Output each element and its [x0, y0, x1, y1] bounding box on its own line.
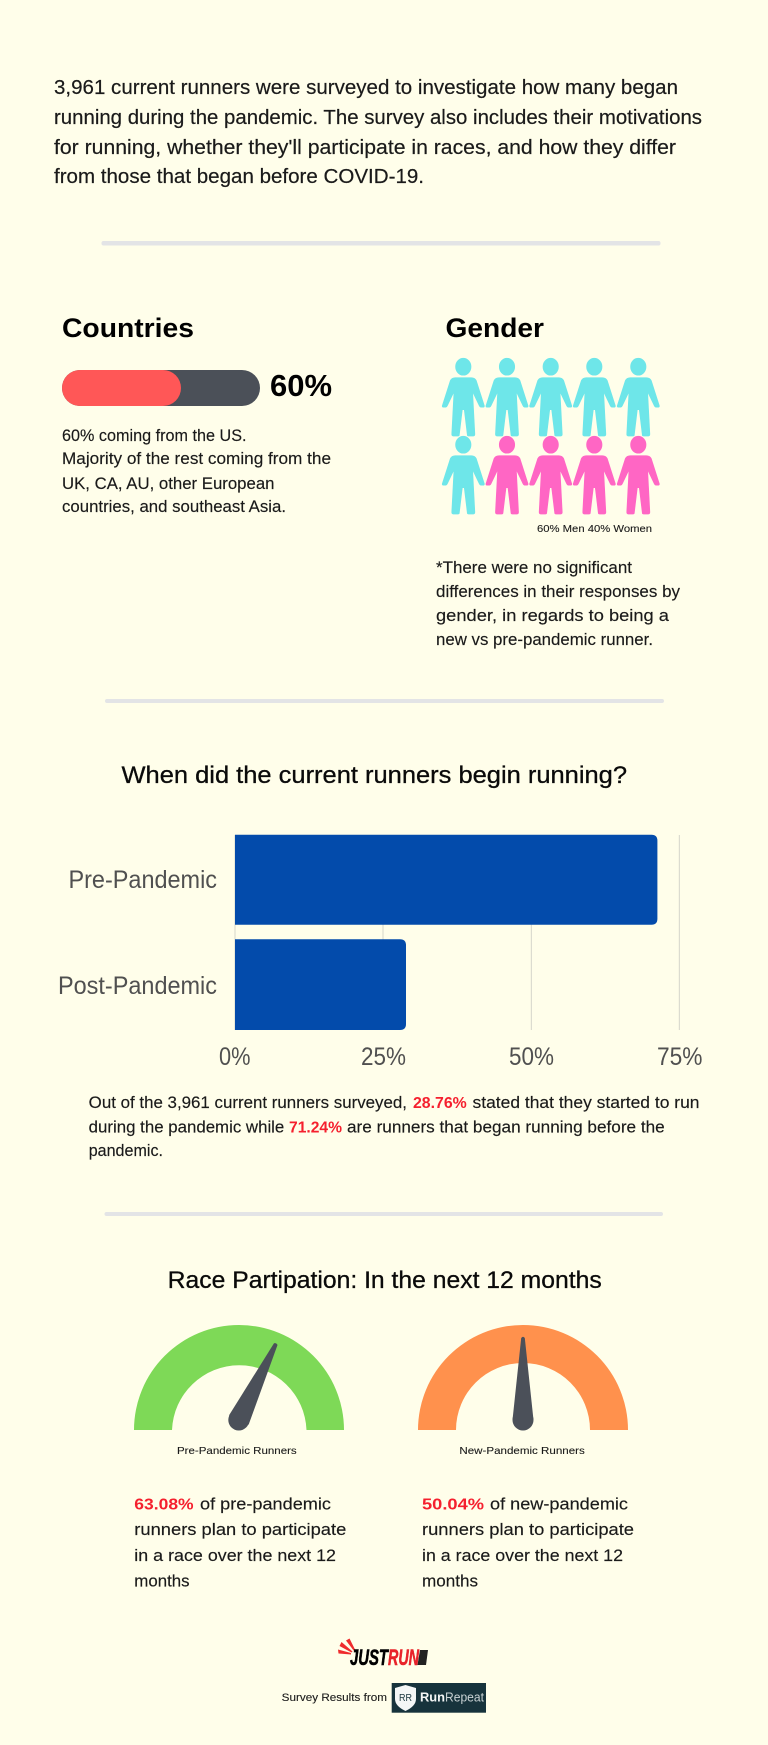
heading: countries: Countries [62, 313, 194, 343]
countries description: countries, and southeast Asia. [62, 498, 286, 516]
countries description: 60% coming from the US. [62, 427, 246, 445]
panel: race participation [134, 1267, 634, 1591]
text: new-pandemic participation: runners plan to participate [422, 1521, 634, 1539]
pictogram: 60% men 40% women [442, 358, 659, 514]
logo: RunRepeat: RR [399, 1693, 412, 1704]
text: new-pandemic participation: months [422, 1573, 478, 1591]
chart description: during the pandemic while [89, 1119, 284, 1137]
intro paragraph [54, 76, 702, 188]
footer: survey results credit [282, 1683, 486, 1713]
intro paragraph: for running, whether they'll participate in races, and how they differ [54, 136, 676, 159]
logo: RunRepeat: Run [420, 1690, 445, 1704]
text: new-pandemic participation: 50.04% [422, 1496, 484, 1513]
value: 60%: 60% [270, 368, 332, 403]
gender footnote: *There were no significant [436, 559, 632, 577]
needle: new-pandemic [512, 1337, 534, 1430]
countries description: Majority of the rest coming from the [62, 450, 331, 468]
icon: red rays [338, 1638, 356, 1654]
intro paragraph: from those that began before COVID-19. [54, 165, 424, 188]
needle: pre-pandemic [228, 1343, 278, 1430]
icon: shield [395, 1685, 416, 1711]
intro paragraph: 3,961 current runners were surveyed to investigate how many began [54, 76, 678, 99]
gauge caption: pre-pandemic: Pre-Pandemic Runners [177, 1445, 297, 1457]
text: pre-pandemic participation: months [134, 1573, 190, 1591]
gender footnote: gender, in regards to being a [436, 607, 670, 625]
logo: RunRepeat [392, 1683, 486, 1713]
pictogram caption: 60% Men 40% Women [537, 523, 652, 535]
gender footnote: new vs pre-pandemic runner. [436, 631, 653, 649]
x axis labels: 50% [509, 1043, 554, 1071]
heading: gender: Gender [446, 313, 545, 343]
text: new-pandemic participation [422, 1495, 634, 1591]
gender footnote: differences in their responses by [436, 583, 681, 601]
footer: survey results credit: Survey Results from [282, 1692, 387, 1704]
text: pre-pandemic participation: runners plan to participate [134, 1521, 346, 1539]
x axis labels: 75% [657, 1043, 702, 1071]
gauge: new-pandemic runners [418, 1325, 628, 1430]
intro paragraph: running during the pandemic. The survey also includes their motivations [54, 106, 702, 129]
logo: JustRun [338, 1638, 428, 1670]
gauge: pre-pandemic runners [134, 1325, 344, 1430]
bar chart [58, 835, 702, 1071]
chart description: Out of the 3,961 current runners surveyed, [89, 1094, 407, 1112]
text: new-pandemic participation: of new-pandemic [490, 1495, 628, 1513]
label: pre-pandemic: Pre-Pandemic [68, 866, 217, 894]
chart description: 71.24% [289, 1120, 342, 1137]
panel: when runners began [58, 762, 702, 1160]
text: pre-pandemic participation [134, 1495, 346, 1591]
chart description: stated that they started to run [472, 1094, 700, 1112]
text: pre-pandemic participation: 63.08% [134, 1496, 194, 1513]
bar: post-pandemic [235, 939, 406, 1030]
gender footnote [436, 559, 681, 649]
chart description [89, 1094, 699, 1160]
text: pre-pandemic participation: in a race over the next 12 [134, 1547, 336, 1565]
panel: gender [436, 313, 681, 649]
gauge caption: new-pandemic: New-Pandemic Runners [459, 1445, 585, 1457]
x axis labels: 0% [219, 1043, 250, 1071]
x axis labels: 25% [361, 1043, 406, 1071]
countries description [62, 427, 331, 516]
label: post-pandemic: Post-Pandemic [58, 972, 217, 1000]
heading: race participation: Race Partipation: In the next 12 months [168, 1267, 602, 1294]
text: new-pandemic participation: in a race over the next 12 [422, 1547, 623, 1565]
text: pre-pandemic participation: of pre-pandemic [200, 1495, 331, 1513]
countries description: UK, CA, AU, other European [62, 475, 274, 493]
logo: JustRun: JUST [350, 1645, 389, 1670]
x axis labels [219, 1043, 702, 1071]
heading: when did runners begin: When did the current runners begin running? [122, 762, 627, 789]
chart description: pandemic. [89, 1142, 163, 1160]
progress bar: 60% [62, 370, 260, 406]
panel: countries [62, 313, 332, 516]
logo: RunRepeat: Repeat [445, 1690, 484, 1704]
chart description: are runners that began running before the [347, 1119, 665, 1137]
chart description: 28.76% [413, 1095, 467, 1112]
logo: JustRun: RUN [388, 1645, 420, 1670]
bar: pre-pandemic [235, 835, 657, 925]
